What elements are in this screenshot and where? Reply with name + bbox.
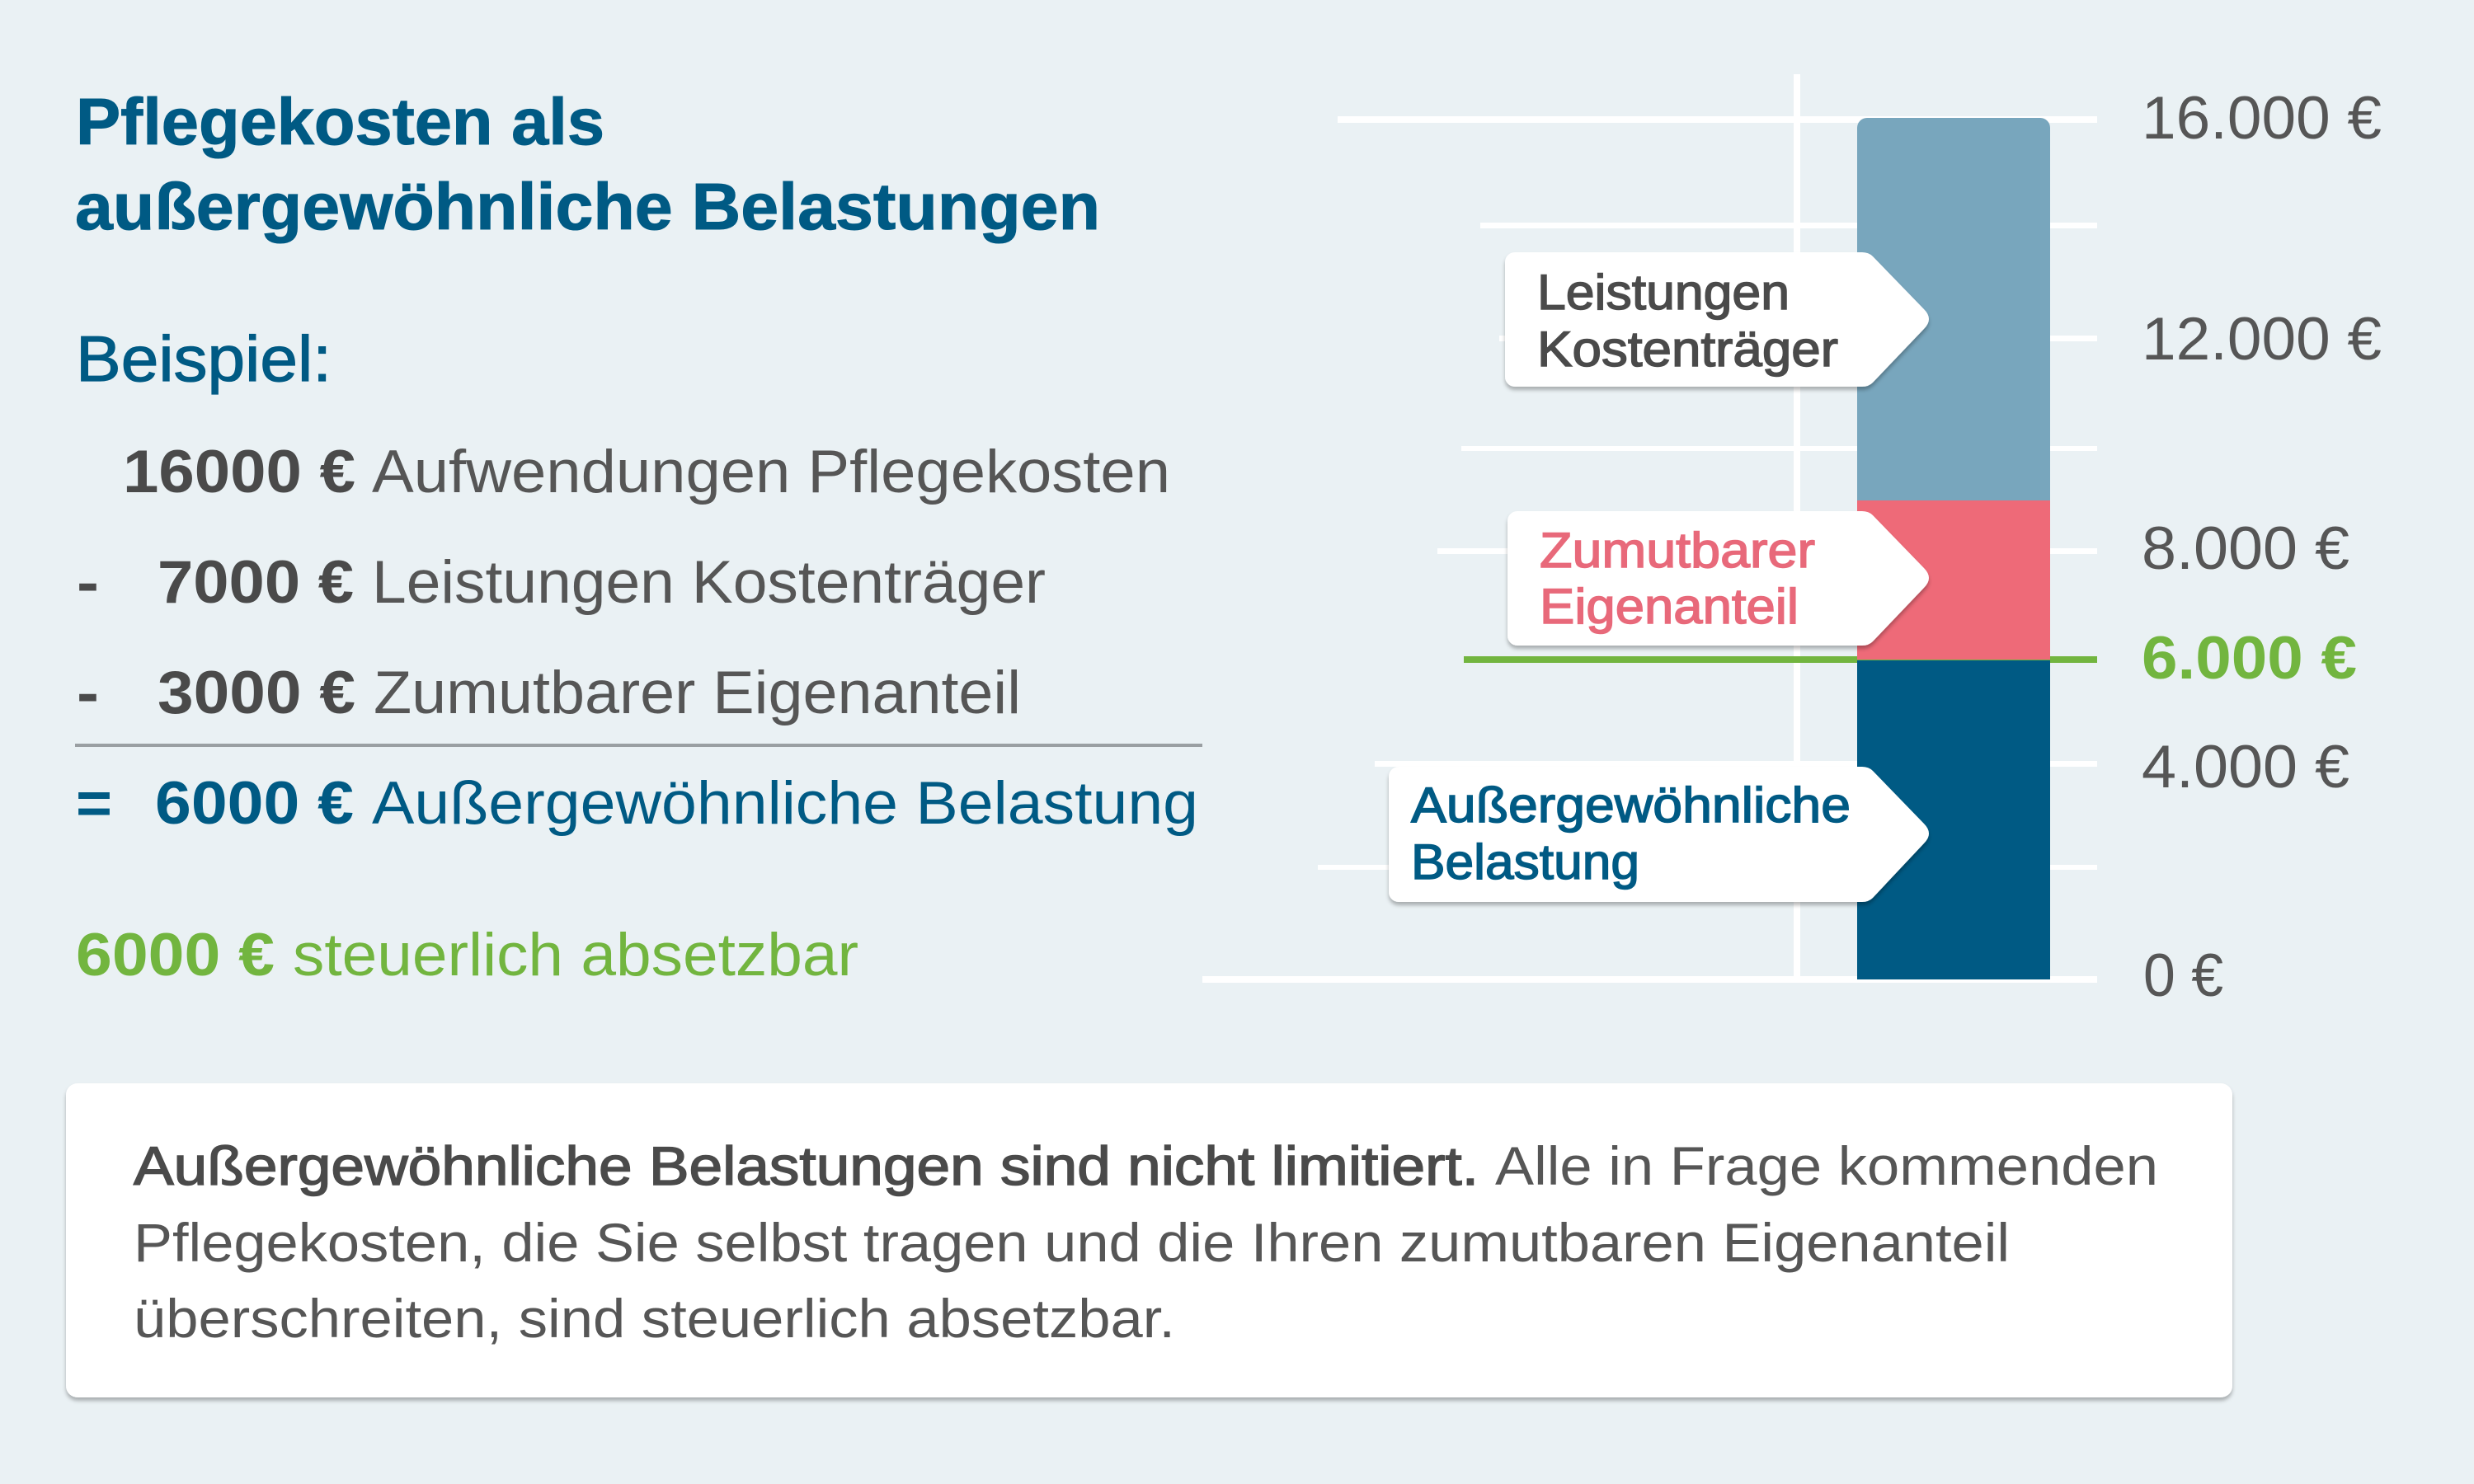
row: Aufwendungen Pflegekosten: 16000 € [123,439,355,505]
row: Zumutbarer Eigenanteil [77,660,1021,726]
axis labels: 16.000 € [2142,85,2382,152]
callout: Außergewöhnliche Belastung: Belastung [1411,834,1639,890]
sum line [75,744,1202,747]
result: steuerlich absetzbar: steuerlich absetzbar [293,922,858,989]
bar segment: Leistungen Kostenträger [1857,118,2050,500]
callout: Außergewöhnliche Belastung [1389,767,1929,902]
callout: Zumutbarer Eigenanteil: Zumutbarer [1540,523,1815,578]
title: Pflegekosten als [76,85,604,158]
bar segment: Zumutbarer Eigenanteil [1857,500,2050,660]
axis label: 6.000 €: 6.000 € [2142,625,2357,692]
axis labels [2142,85,2382,1009]
row: Aufwendungen Pflegekosten: Aufwendungen Pflegekosten [372,439,1170,505]
callout: Außergewöhnliche Belastung: Außergewöhnliche [1411,777,1851,833]
axis labels: 12.000 € [2142,306,2382,373]
note text: Pflegekosten, die Sie selbst tragen und die Ihren zumutbaren Eigenanteil [134,1212,2010,1273]
note text: Außergewöhnliche Belastungen sind nicht limitiert. [134,1135,1479,1196]
row: Außergewöhnliche Belastung: Außergewöhnliche Belastung [372,770,1198,837]
calculation rows [75,439,1202,989]
result: steuerlich absetzbar: 6000 € [76,922,275,989]
row: Leistungen Kostenträger: Leistungen Kostenträger [372,549,1046,616]
row: Außergewöhnliche Belastung: = [76,770,112,837]
axis labels: 0 € [2143,942,2223,1009]
note text: überschreiten, sind steuerlich absetzbar. [134,1288,1175,1349]
row: Leistungen Kostenträger [77,549,1046,616]
note text: Alle in Frage kommenden [1495,1135,2158,1196]
callout: Zumutbarer Eigenanteil: Eigenanteil [1540,579,1799,634]
note text [134,1135,2158,1349]
grid lines [1202,74,2097,983]
callout: Leistungen Kostenträger: Kostenträger [1537,322,1838,377]
callout: Leistungen Kostenträger: Leistungen [1537,265,1790,320]
row: Zumutbarer Eigenanteil: 3000 € [158,660,355,726]
result: steuerlich absetzbar [76,922,858,989]
row: Zumutbarer Eigenanteil: - [77,660,99,726]
row: Leistungen Kostenträger: - [77,549,99,616]
callout: Leistungen Kostenträger [1505,252,1929,387]
title: außergewöhnliche Belastungen [75,170,1100,243]
bar segment: Außergewöhnliche Belastung [1857,660,2050,979]
row: Leistungen Kostenträger: 7000 € [158,549,354,616]
axis labels: 4.000 € [2142,734,2349,801]
row: Zumutbarer Eigenanteil: Zumutbarer Eigenanteil [374,660,1021,726]
callout: Zumutbarer Eigenanteil [1507,511,1929,646]
chart: stacked bar with axis [1202,74,2382,1009]
subheading: Beispiel: Beispiel: [76,322,332,395]
title [75,85,1100,243]
panel: note [66,1083,2232,1397]
row: Außergewöhnliche Belastung: 6000 € [155,770,354,837]
axis labels: 8.000 € [2142,515,2349,582]
row: Außergewöhnliche Belastung [76,770,1198,837]
green threshold line [1464,656,2097,663]
